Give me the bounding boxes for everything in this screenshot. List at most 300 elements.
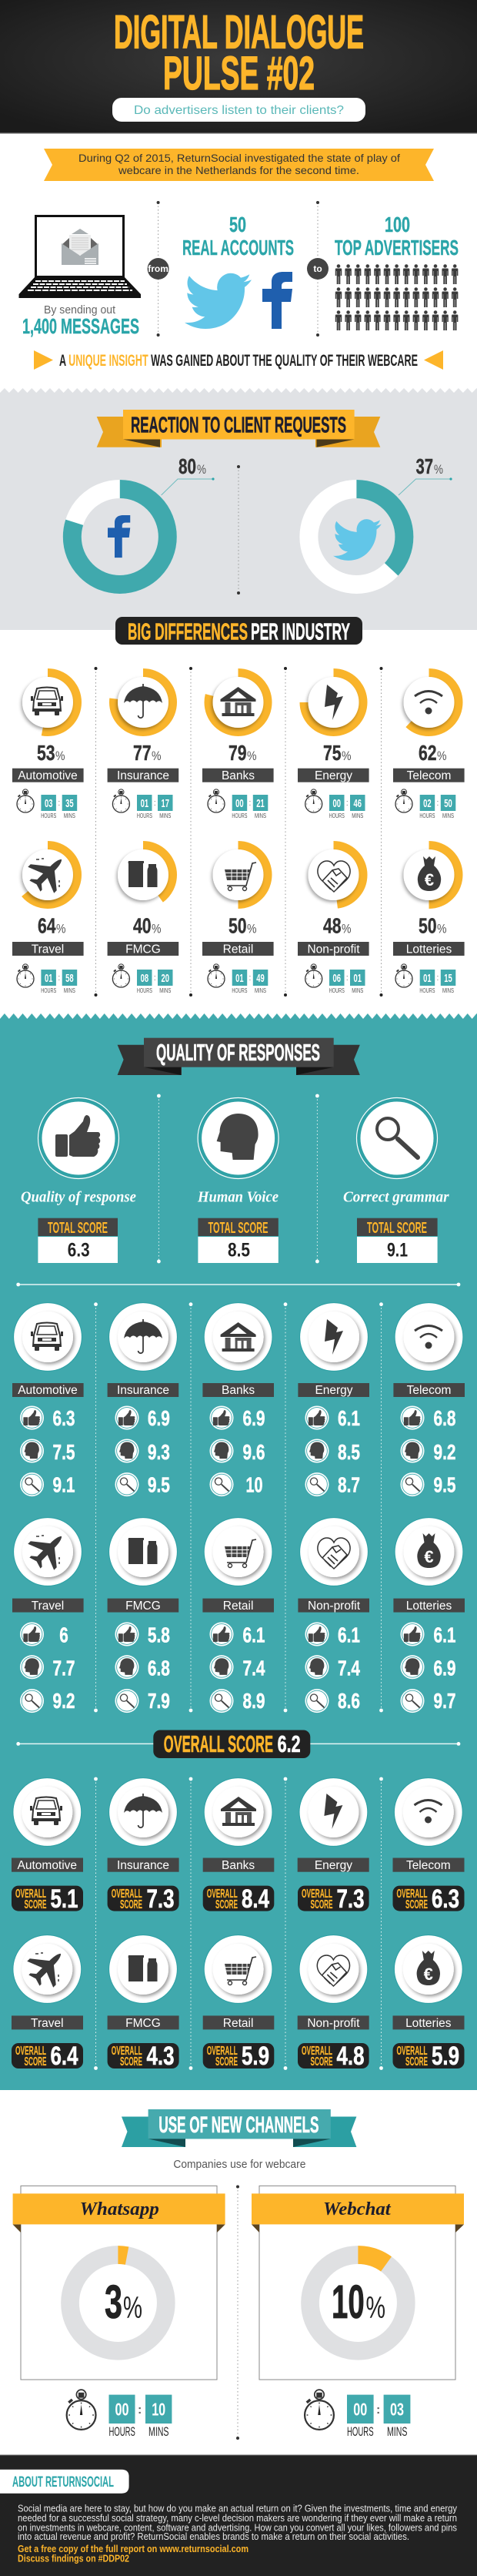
three scores: 7.5 [52,1440,75,1464]
call to action: Discuss findings on #DDP02 [18,2553,129,2564]
subheading: Companies use for webcare [173,2159,305,2171]
overall: Automotive 5.1 [12,1778,83,1914]
three scores: 7.9 [148,1689,170,1713]
timer: webchat response: 00 [353,2400,367,2420]
percentage: 50 [419,914,437,938]
call to action: Get a free copy of the full report on www.returnsocial.com [18,2544,249,2554]
response time: 20 [162,972,169,985]
card: Lotteries 50% [393,846,465,994]
heading: big differences per industry: BIG DIFFERENCES [128,618,248,645]
percentage: % [55,749,65,763]
three scores: 10 [246,1473,263,1497]
card: Energy 75% [298,673,369,819]
timer: webchat response [305,2390,410,2439]
donut: 10%: 10 [332,2276,365,2328]
icon badge [109,1518,177,1586]
label: Non-profit [307,2017,360,2030]
icon: facebook f [262,272,292,329]
overall: Retail 5.9 [203,1935,274,2071]
response time [305,964,365,994]
label [108,769,178,782]
donut: facebook 80%: 80 [178,454,196,478]
response time [17,789,77,819]
text: 1,400 messages: 1,400 MESSAGES [22,314,139,338]
three scores: 6.9 [148,1406,170,1430]
label: Energy [315,1859,352,1872]
total score box [38,1218,118,1263]
three scores [209,1406,265,1497]
icon: thumb [38,1098,118,1178]
icon badge [109,1303,177,1371]
total score box: TOTAL SCORE [208,1220,268,1237]
score badge [392,2042,465,2071]
response time: 01 [235,972,244,985]
response time: : [58,799,60,808]
response time: HOURS [41,987,56,994]
text: caption: Human Voice [197,1189,279,1206]
text: caption: Quality of response [21,1189,136,1206]
score badge: SCORE [215,2055,238,2069]
three scores: 6.9 [243,1406,265,1430]
card: Non-profit 48% [298,846,369,994]
response time: 01 [141,797,148,810]
score badge: OVERALL [112,2045,142,2058]
about text [18,2503,457,2542]
percentage: 64 [38,914,56,938]
heading: overall score 6.2: OVERALL SCORE [164,1731,273,1757]
header panel [0,0,477,134]
timer: whatsapp response: : [138,2403,142,2417]
card: Banks 79% [202,673,274,819]
overall: Telecom 6.3 [392,1778,465,1914]
percentage: 50 [228,914,247,938]
label [298,942,369,956]
label [202,1383,274,1397]
human voice score [197,1098,279,1263]
label: FMCG [125,1600,161,1613]
response time: : [436,973,439,983]
score badge [12,2042,83,2071]
total score box [357,1218,438,1263]
card: Automotive 53% [12,673,84,819]
three scores: 8.6 [338,1689,360,1713]
response time [208,789,268,819]
score badge: 7.3 [146,1884,174,1914]
heading band [13,2193,225,2224]
separator line [16,1283,460,1286]
label: Telecom [407,1384,451,1397]
overall: FMCG 4.3 [108,1935,179,2071]
laptop with messages [18,216,141,338]
icon badge: € [424,1547,434,1566]
score badge [203,2042,274,2071]
timer: whatsapp response: MINS [148,2424,169,2439]
icon badge [394,1778,462,1846]
icon badge: € [424,1965,433,1984]
response time: 15 [444,972,452,985]
icon: twitter bird [185,273,252,329]
score badge: 8.4 [242,1884,269,1914]
three scores: 6.9 [434,1656,455,1680]
label [392,2015,465,2030]
score badge: 6.4 [51,2042,78,2071]
score badge [392,1884,465,1914]
donut [209,846,267,904]
three scores [305,1406,360,1497]
donut: facebook 80%: % [197,462,206,477]
call to action [18,2544,249,2564]
label: Non-profit [307,943,360,956]
timer: webchat response: HOURS [347,2424,374,2439]
score badge [108,2042,179,2071]
score badge: SCORE [405,1898,428,1911]
response time: 01 [423,972,432,985]
donut [305,846,362,904]
three scores: 8.9 [243,1689,265,1713]
card: Insurance 77% [108,673,178,819]
overall: Banks 8.4 [203,1778,274,1914]
three scores: 9.1 [52,1473,75,1497]
label [298,769,369,782]
heading ribbon [97,410,380,447]
response time: HOURS [137,812,152,819]
label: Energy [315,1384,353,1397]
three scores: 9.5 [148,1473,170,1497]
response time: HOURS [419,812,435,819]
label: FMCG [125,943,161,956]
heading band: Whatsapp [80,2199,159,2219]
response time: 01 [354,972,362,985]
three scores: 6.1 [338,1406,360,1430]
three scores: 8.7 [338,1473,360,1497]
response time: : [58,973,60,983]
icon badge [13,1778,82,1846]
response time: 46 [354,797,362,810]
percentage: % [56,922,66,936]
quality of response score [21,1098,136,1263]
donut: twitter 37%: % [434,462,443,477]
percentage: % [342,749,351,763]
divider with to badge: to [313,263,322,274]
block: 100 top advertisers [334,213,460,330]
icon: head [198,1098,279,1178]
label [203,1857,274,1872]
label: Retail [223,1600,253,1613]
total score box: 8.5 [228,1240,250,1261]
response time: : [249,973,251,983]
text: caption: Correct grammar [343,1189,449,1206]
card: Retail 50% [202,846,274,994]
icon badge [299,1935,368,2003]
donut: 10% [310,2255,406,2351]
block: 50 real accounts [182,213,294,329]
label: Automotive [18,1859,77,1872]
correct grammar score [343,1098,449,1263]
donut: 3%: % [123,2291,142,2325]
response time [305,789,365,819]
three scores [305,1622,360,1713]
response time: HOURS [232,812,247,819]
three scores [209,1622,265,1713]
block: 100 top advertisers: 100 [385,213,410,236]
percentage: % [437,922,446,936]
score badge: SCORE [405,2055,428,2069]
icon badge [299,1778,368,1846]
label: Insurance [117,1859,169,1872]
divider with from badge: from [148,263,168,274]
three scores: 8.5 [338,1440,360,1464]
total score box [198,1218,279,1263]
title: PULSE #02 [163,47,315,99]
scores: Automotive [12,1303,84,1497]
score badge [298,2042,369,2071]
label: Retail [223,2017,253,2030]
card: Travel 64% [12,846,84,994]
label [393,942,465,956]
label [12,942,84,956]
subtitle pill: Do advertisers listen to their clients? [134,104,344,117]
three scores: 9.3 [148,1440,170,1464]
three scores [115,1622,170,1713]
tag: about returnsocial: ABOUT RETURNSOCIAL [12,2474,114,2491]
overall: Energy 7.3 [298,1778,369,1914]
label [108,2015,179,2030]
label [298,2015,369,2030]
three scores: 5.8 [148,1623,170,1646]
label: Travel [32,1600,64,1613]
heading ribbon: quality of responses [118,1038,360,1075]
label: Travel [32,943,64,956]
title [114,6,364,99]
response time [395,789,455,819]
icon: laptop [18,216,141,298]
label [202,769,274,782]
text: by sending out: By sending out [44,303,116,317]
heading: overall score 6.2: 6.2 [278,1731,301,1757]
three scores: 6.1 [434,1623,455,1646]
response time: 03 [45,797,52,810]
total score box: 9.1 [387,1240,408,1261]
three scores [400,1622,455,1713]
score badge: SCORE [120,1898,142,1911]
response time: HOURS [137,987,152,994]
label: Banks [222,1859,255,1872]
three scores: 7.4 [243,1656,265,1680]
timer: webchat response: : [376,2403,380,2417]
three scores [115,1406,170,1497]
score badge: OVERALL [397,1888,428,1901]
response time: HOURS [41,812,56,819]
score badge: 4.3 [146,2042,174,2071]
block: 50 real accounts: 50 [229,213,246,236]
response time: MINS [352,812,363,819]
score badge: OVERALL [15,2045,46,2058]
three scores [20,1622,75,1713]
donut [18,846,77,904]
tag: about returnsocial [0,2470,129,2494]
three scores: 9.5 [434,1473,455,1497]
intro ribbon: webcare in the Netherlands for the second time. [118,164,359,176]
overall: Insurance 7.3 [108,1778,179,1914]
icon badge [204,1935,272,2003]
score badge: OVERALL [302,2045,332,2058]
label [108,942,178,956]
column dividers: overall grid [94,1777,383,2070]
response time: MINS [442,987,454,994]
percentage: 40 [133,914,152,938]
panel: reaction to client requests [0,388,477,630]
label [12,1599,84,1613]
label: Retail [223,943,253,956]
scores: Banks [202,1303,274,1497]
icon badge [109,1935,177,2003]
three scores: 6.8 [434,1406,455,1430]
subtitle pill [112,98,365,122]
scores: FMCG [108,1518,178,1713]
response time: : [436,799,439,808]
donut [18,673,77,732]
panel: whatsapp [13,2186,225,2380]
scores: Energy [298,1303,369,1497]
icon badge [14,1518,82,1586]
overall: Non-profit 4.8 [298,1935,369,2071]
response time: MINS [352,987,363,994]
label [298,1857,369,1872]
response time: HOURS [419,987,435,994]
response time: : [249,799,251,808]
timer: webchat response: 03 [390,2400,404,2420]
donut: 3% [70,2255,166,2351]
heading band [252,2193,464,2224]
panel: quality background [0,1013,477,2090]
response time [208,964,268,994]
total score box: TOTAL SCORE [367,1220,427,1237]
label: Lotteries [406,1600,452,1613]
three scores: 6 [59,1623,68,1646]
heading ribbon: use of new channels [122,2109,356,2147]
score badge: SCORE [120,2055,142,2069]
scores: Travel [12,1518,84,1713]
response time [395,964,455,994]
percentage: % [152,922,162,936]
percentage: 53 [37,741,55,765]
block: 50 real accounts: REAL ACCOUNTS [182,236,294,260]
label [12,2015,83,2030]
label: Energy [315,769,352,782]
scores: Lotteries [393,1518,465,1713]
label: Insurance [117,1384,169,1397]
icon badge [300,1303,368,1371]
label [203,2015,274,2030]
response time: MINS [64,812,75,819]
response time: : [346,973,349,983]
score badge [203,1884,274,1914]
timer: whatsapp response: 10 [152,2400,165,2420]
label: Insurance [117,769,169,782]
timer: webchat response: MINS [387,2424,407,2439]
three scores: 9.7 [434,1689,455,1713]
label: Non-profit [308,1600,361,1613]
icon badge [204,1518,272,1586]
three scores: 9.6 [243,1440,265,1464]
response time: 06 [333,972,341,985]
three scores [400,1406,455,1497]
score badge: SCORE [25,2055,47,2069]
response time: : [346,799,349,808]
divider with from badge [148,201,169,337]
three scores: 6.8 [148,1656,170,1680]
label: Lotteries [405,2017,452,2030]
scores: Telecom [393,1303,465,1497]
divider [157,1094,319,1263]
response time: 58 [65,972,74,985]
three scores: 7.7 [52,1656,75,1680]
response time: 08 [141,972,148,985]
label [298,1599,369,1613]
donut: facebook 80% [72,454,215,585]
donut [305,673,362,732]
three scores: 6.3 [52,1406,75,1430]
score badge: 5.1 [51,1884,78,1914]
icon: envelope [62,229,98,265]
timer: whatsapp response: HOURS [109,2424,135,2439]
response time: 50 [444,797,452,810]
percentage: 75 [323,741,342,765]
label: Telecom [406,1859,451,1872]
three scores: 9.2 [434,1440,455,1464]
total score box: TOTAL SCORE [48,1220,108,1237]
response time: 02 [423,797,432,810]
percentage: % [247,749,257,763]
response time: : [154,973,156,983]
response time: 17 [162,797,169,810]
donut: twitter 37%: 37 [415,454,433,478]
donut [114,673,172,732]
about text: into actual revenue and profit? ReturnSocial enables brands to make a return on their social activities. [18,2531,409,2542]
heading band: Webchat [323,2199,392,2219]
score badge: SCORE [311,1898,333,1911]
score badge: 5.9 [432,2042,459,2071]
score badge [108,1884,179,1914]
score badge: OVERALL [207,1888,238,1901]
score badge: OVERALL [207,2045,238,2058]
icon: people grid [334,264,460,330]
score badge: SCORE [311,2055,333,2069]
column dividers: scores grid [94,1302,383,1712]
donut [114,846,172,904]
donut: € [425,870,434,889]
scores: Non-profit [298,1518,369,1713]
donut [400,846,458,904]
label [108,1383,178,1397]
card: FMCG 40% [108,846,178,994]
response time: 01 [45,972,52,985]
percentage: % [342,922,351,936]
icon badge [14,1303,82,1371]
score badge: 4.8 [337,2042,365,2071]
divider with to badge [307,201,329,337]
percentage: % [152,749,162,763]
intro ribbon: During Q2 of 2015, ReturnSocial investigated the state of play of [78,152,400,164]
three scores: 6.1 [243,1623,265,1646]
panel: webchat [252,2186,464,2380]
heading ribbon: use of new channels: USE OF NEW CHANNELS [158,2112,319,2138]
response time [112,789,172,819]
label: Travel [31,2017,64,2030]
footer panel: about [0,2455,477,2576]
label [392,1857,465,1872]
response time: MINS [159,987,171,994]
